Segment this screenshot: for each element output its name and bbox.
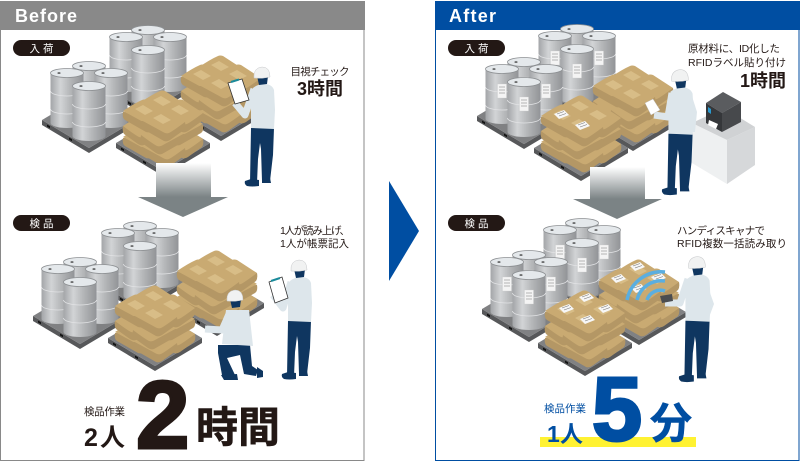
label pill: 入荷	[13, 40, 70, 56]
worker with handheld scanner	[660, 257, 714, 382]
text: RFID labeling time: 1時間	[740, 71, 786, 91]
label pill: 入荷: 入 荷	[30, 43, 53, 55]
text: RFID labeling time: RFIDラベル貼り付け	[688, 56, 786, 69]
label pill: 検品	[13, 215, 70, 231]
text: RFID labeling time	[688, 42, 786, 91]
icon: RFID label printer on table	[692, 92, 755, 184]
label pill: 入荷: 入 荷	[465, 43, 488, 55]
result: 2 people 2 hours: 時間	[196, 404, 280, 451]
arrow: before to after	[389, 181, 419, 281]
header: before: Before	[15, 6, 77, 26]
result: 2 people 2 hours: 2人	[84, 424, 125, 452]
label pill: 検品	[448, 215, 505, 231]
label pill: 検品: 検 品	[30, 217, 53, 230]
label pill: 入荷	[448, 40, 505, 56]
header: after	[435, 1, 800, 30]
text: reading and recording: 1人が帳票記入	[280, 237, 350, 250]
header: before	[0, 1, 365, 30]
result: 2 people 2 hours: 検品作業	[84, 405, 126, 418]
text: visual check time	[290, 65, 350, 99]
illustration: scanner inspection	[482, 218, 714, 382]
panel: before	[0, 1, 365, 461]
down arrow	[573, 167, 662, 219]
panel: after	[435, 1, 800, 460]
illustration: inspection with two workers	[33, 222, 312, 380]
result: 2 people 2 hours	[84, 362, 280, 461]
result: 1 person 5 minutes	[540, 360, 696, 460]
text: visual check time: 目視チェック	[290, 65, 350, 78]
person with clipboard	[228, 67, 275, 186]
text: handheld scanning: RFID複数一括読み取り	[677, 237, 787, 250]
standing worker with clipboard	[269, 260, 312, 380]
kneeling worker	[205, 290, 263, 380]
result: 1 person 5 minutes: 5	[592, 360, 642, 460]
text: handheld scanning	[677, 224, 787, 250]
result: 1 person 5 minutes: 分	[650, 400, 692, 447]
icon: RFID waves	[627, 272, 665, 300]
text: visual check time: 3時間	[297, 79, 343, 99]
illustration: drums and sacks on pallets with inspector	[42, 26, 275, 186]
text: RFID labeling time: 原材料に、ID化した	[688, 42, 780, 55]
result: 1 person 5 minutes: 検品作業	[544, 402, 586, 415]
illustration: labeled drums and sacks, printer	[477, 24, 755, 195]
result: 1 person 5 minutes: 1人	[547, 421, 583, 447]
header: after: After	[449, 6, 496, 26]
text: handheld scanning: ハンディスキャナで	[677, 224, 765, 237]
text: reading and recording: 1人が読み上げ、	[280, 224, 350, 237]
down arrow	[138, 163, 228, 217]
text: reading and recording	[280, 224, 350, 250]
label pill: 検品: 検 品	[465, 217, 488, 230]
worker holding label	[645, 70, 697, 195]
